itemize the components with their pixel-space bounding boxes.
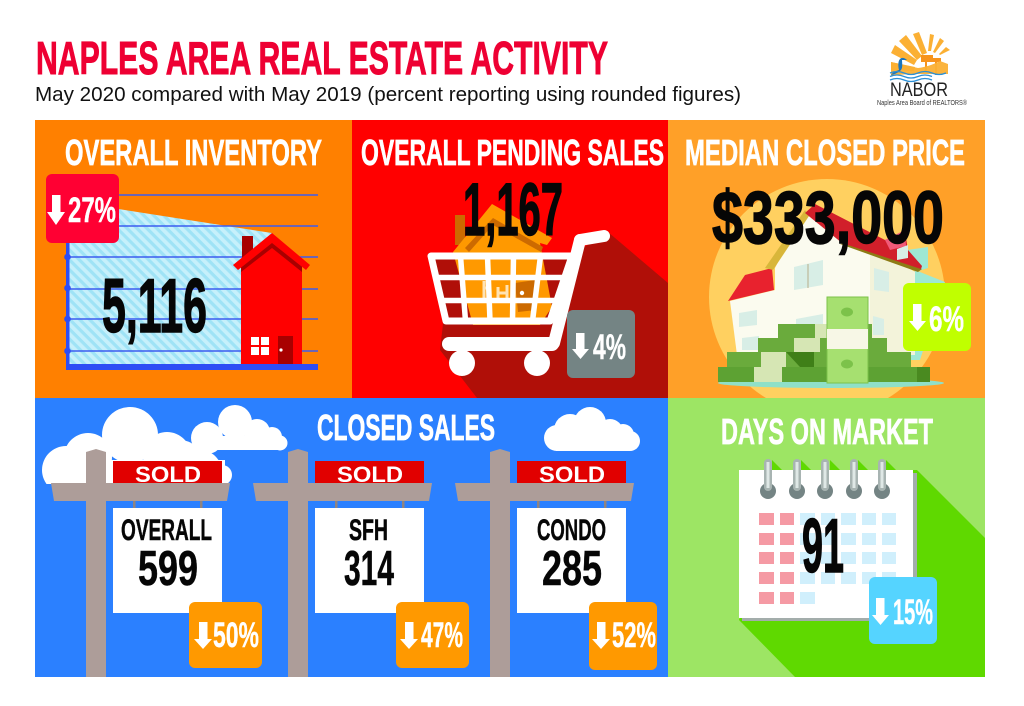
icon: red house [233,233,310,364]
badge: down 15% [869,577,937,644]
clouds [42,405,640,484]
sold sign: overall [51,449,230,677]
icon: calendar [739,459,917,621]
sold sign: condo [455,449,634,677]
logo: NABOR: NABOR [890,80,948,101]
value: 1,167: 1,167 [463,168,563,251]
badge: down 15%: 15% [893,593,933,632]
value: $333,000: $333,000 [712,176,944,259]
badge: down 6% [903,283,971,351]
long shadow of calendar [739,470,985,677]
icon: shopping cart [431,236,604,376]
panel: overall pending sales [352,120,668,398]
badge: down 52% [589,602,657,670]
sold sign: SFH [253,449,432,677]
heading: closed sales: CLOSED SALES [317,407,495,448]
heading: overall pending sales: OVERALL PENDING SALES [361,132,664,173]
badge: down 4%: 4% [593,328,626,367]
badge: down 50% [189,602,262,668]
sold sign: overall: SOLD [135,462,201,487]
badge: down 4% [567,310,635,378]
panel: closed sales [35,398,668,677]
panel: days on market [668,398,985,677]
icon: orange house in cart [453,204,552,325]
logo: NABOR [877,32,967,107]
sold sign: overall: 599 [138,542,198,596]
sold sign: condo: SOLD [539,462,605,487]
badge: down 27% [46,174,119,243]
badge: down 47% [396,602,469,668]
icon: house and money [709,179,945,415]
subtitle: May 2020 compared with May 2019 (percent reporting using rounded figures) [35,83,741,106]
panel: overall inventory [35,120,352,398]
sold sign: SFH: SFH [349,514,388,547]
logo: NABOR: Naples Area Board of REALTORS® [877,98,967,107]
badge: down 27%: 27% [68,191,116,230]
sold sign: overall: OVERALL [121,514,212,547]
sold sign: SFH: SOLD [337,462,403,487]
sold sign: condo: CONDO [537,514,606,547]
heading: overall inventory: OVERALL INVENTORY [65,132,322,173]
badge: down 52%: 52% [612,616,656,655]
panel: days on market: 91 [802,504,844,589]
badge: down 6%: 6% [929,300,964,339]
badge: down 50%: 50% [213,616,259,655]
panel: median closed price [668,120,985,415]
value: 5,116: 5,116 [102,264,207,349]
sold sign: condo: 285 [542,542,602,596]
badge: down 47%: 47% [421,616,463,655]
long shadow of cart [428,232,668,398]
sold sign: SFH: 314 [344,542,394,596]
chart: inventory area with grid lines [64,195,318,370]
title: NAPLES AREA REAL ESTATE ACTIVITY [36,32,608,84]
